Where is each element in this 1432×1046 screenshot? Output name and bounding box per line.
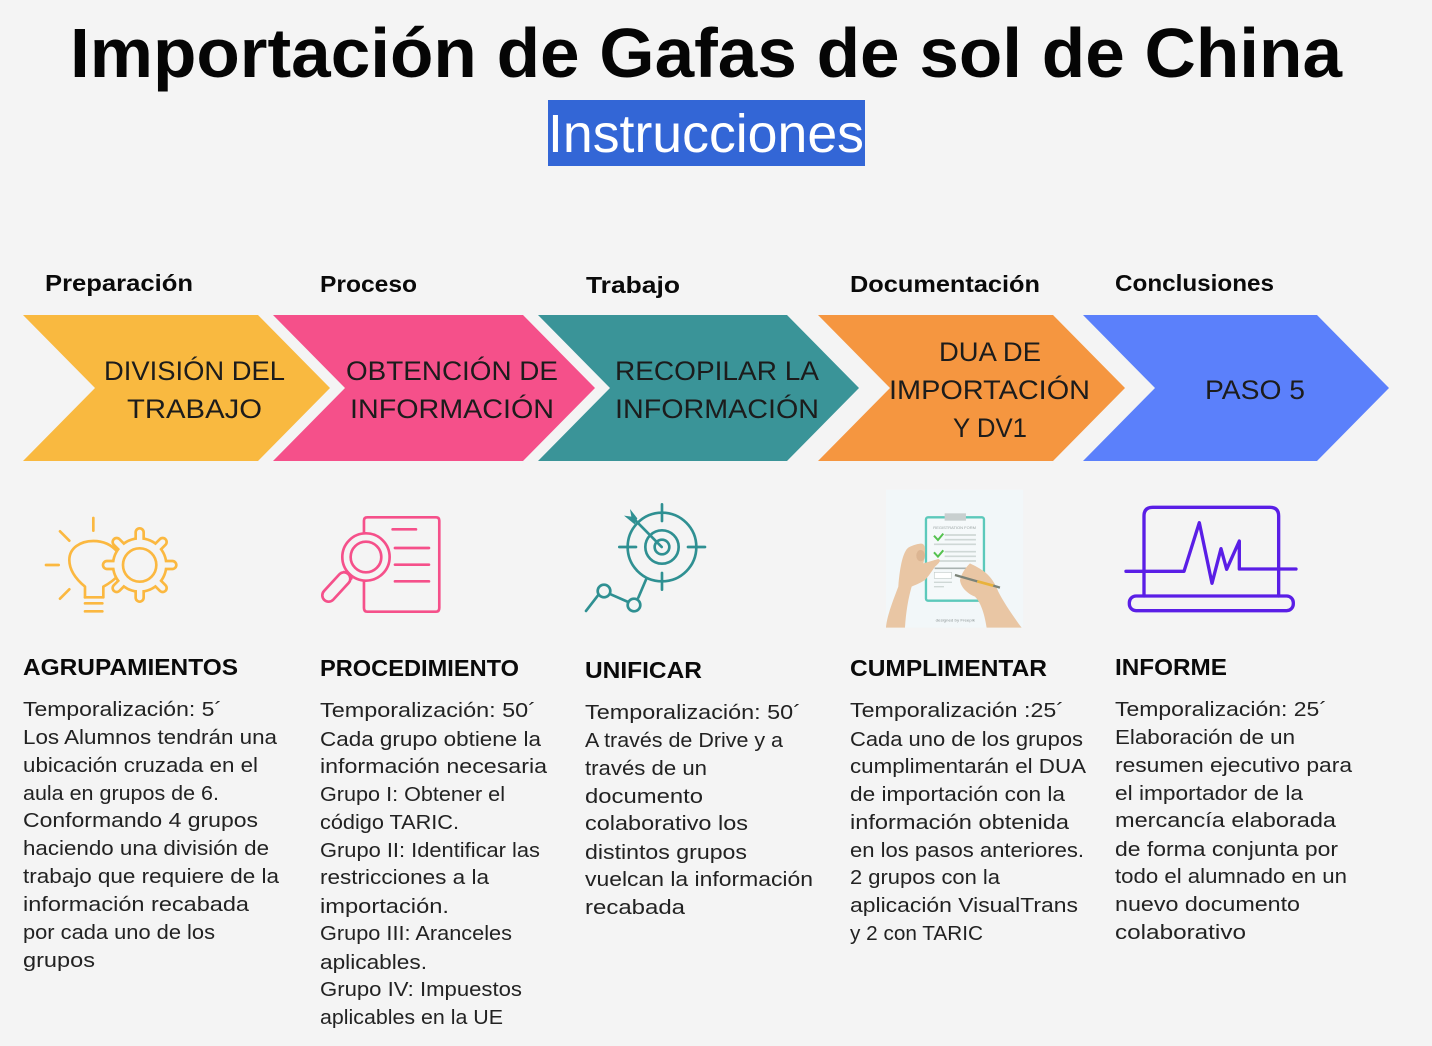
text block: procedimiento: importación. — [320, 895, 449, 918]
text block: cumplimentar: en los pasos anteriores. — [850, 839, 1084, 862]
step label: Documentación: Documentación — [850, 271, 1040, 297]
text block: agrupamientos: Los Alumnos tendrán una — [23, 726, 278, 749]
heading: agrupamientos: AGRUPAMIENTOS — [23, 654, 238, 680]
icon: hands filling in a form: REGISTRATION FORM — [933, 526, 976, 530]
text block: unificar: recabada — [585, 896, 686, 919]
arrow: obtención de información: INFORMACIÓN — [350, 394, 554, 424]
text block: unificar: través de un — [585, 757, 707, 780]
column: cumplimentar — [850, 655, 1086, 945]
icon: magnifier over document — [329, 517, 439, 612]
text block: agrupamientos: haciendo una división de — [23, 837, 269, 860]
icon: hands filling in a form — [886, 490, 1023, 628]
text block: procedimiento: Cada grupo obtiene la — [320, 728, 542, 751]
arrow: paso 5: PASO 5 — [1205, 375, 1305, 405]
text block: procedimiento: aplicables en la UE — [320, 1006, 503, 1029]
text block: unificar: vuelcan la información — [585, 868, 813, 891]
text block: procedimiento: Grupo II: Identificar las — [320, 839, 540, 862]
text block: agrupamientos: Conformando 4 grupos — [23, 809, 258, 832]
text block: procedimiento: código TARIC. — [320, 811, 459, 834]
text block: informe: todo el alumnado en un — [1115, 865, 1347, 888]
step label: Conclusiones: Conclusiones — [1115, 270, 1274, 296]
arrow: obtención de información: OBTENCIÓN DE — [346, 356, 558, 386]
text block: agrupamientos: por cada uno de los — [23, 921, 215, 944]
text block: procedimiento: Temporalización: 50´ — [320, 699, 536, 722]
text block: unificar — [585, 701, 813, 919]
arrow: DUA de importación: DUA DE — [939, 337, 1041, 367]
arrow: división del trabajo: DIVISIÓN DEL — [104, 356, 285, 386]
text block: procedimiento: Grupo III: Aranceles — [320, 922, 512, 945]
text block: procedimiento: Grupo I: Obtener el — [320, 783, 505, 806]
text block: informe: el importador de la — [1115, 782, 1304, 805]
text block: informe: mercancía elaborada — [1115, 809, 1337, 832]
step label: Trabajo: Trabajo — [586, 272, 680, 298]
text block: cumplimentar: información obtenida — [850, 811, 1070, 834]
text block: informe: nuevo documento — [1115, 893, 1300, 916]
icon: laptop with pulse line — [1126, 507, 1296, 611]
text block: unificar: documento — [585, 785, 703, 808]
arrow: DUA de importación — [818, 315, 1125, 461]
text block: procedimiento: restricciones a la — [320, 866, 490, 889]
arrow: recopilar la información: RECOPILAR LA — [615, 356, 819, 386]
heading: procedimiento: PROCEDIMIENTO — [320, 655, 519, 681]
text block: informe — [1115, 698, 1353, 944]
arrow: paso 5 — [1083, 315, 1389, 461]
title: Importación de Gafas de sol de China — [70, 14, 1343, 92]
text block: cumplimentar: 2 grupos con la — [850, 866, 1001, 889]
text block: agrupamientos: grupos — [23, 949, 95, 972]
subtitle: Instrucciones: Instrucciones — [548, 104, 864, 164]
icon: hands filling in a form: designed by Freepik — [936, 618, 975, 622]
text block: unificar: Temporalización: 50´ — [585, 701, 801, 724]
text block: agrupamientos: información recabada — [23, 893, 250, 916]
text block: procedimiento — [320, 699, 548, 1029]
text block: cumplimentar: aplicación VisualTrans — [850, 894, 1078, 917]
arrow: obtención de información — [273, 315, 595, 461]
heading: cumplimentar: CUMPLIMENTAR — [850, 655, 1047, 681]
text block: procedimiento: aplicables. — [320, 951, 427, 974]
text block: agrupamientos: Temporalización: 5´ — [23, 698, 222, 721]
arrow: división del trabajo — [23, 315, 330, 461]
text block: informe: de forma conjunta por — [1115, 838, 1338, 861]
text block: informe: colaborativo — [1115, 921, 1246, 944]
arrow: división del trabajo: TRABAJO — [127, 394, 262, 424]
text block: agrupamientos: ubicación cruzada en el — [23, 754, 258, 777]
column: unificar — [585, 657, 813, 919]
text block: cumplimentar: Temporalización :25´ — [850, 699, 1064, 722]
step label: Proceso: Proceso — [320, 271, 417, 297]
step label: Preparación: Preparación — [45, 270, 193, 296]
column: agrupamientos — [23, 654, 280, 972]
text block: informe: resumen ejecutivo para — [1115, 754, 1353, 777]
icon: lightbulb and gear — [46, 518, 172, 611]
column: informe — [1115, 654, 1353, 944]
text block: cumplimentar: de importación con la — [850, 783, 1066, 806]
text block: informe: Elaboración de un — [1115, 726, 1295, 749]
arrow: DUA de importación: Y DV1 — [953, 413, 1027, 443]
heading: informe: INFORME — [1115, 654, 1227, 680]
arrow: recopilar la información: INFORMACIÓN — [615, 394, 819, 424]
column: procedimiento — [320, 655, 548, 1029]
text block: cumplimentar: Cada uno de los grupos — [850, 728, 1083, 751]
heading: unificar: UNIFICAR — [585, 657, 702, 683]
text block: procedimiento: Grupo IV: Impuestos — [320, 978, 522, 1001]
text block: cumplimentar: cumplimentarán el DUA — [850, 755, 1086, 778]
text block: agrupamientos: aula en grupos de 6. — [23, 782, 219, 805]
text block: cumplimentar — [850, 699, 1086, 945]
text block: unificar: distintos grupos — [585, 841, 747, 864]
text block: unificar: A través de Drive y a — [585, 729, 784, 752]
text block: procedimiento: información necesaria — [320, 755, 548, 778]
text block: agrupamientos — [23, 698, 280, 972]
text block: cumplimentar: y 2 con TARIC — [850, 922, 983, 945]
text block: agrupamientos: trabajo que requiere de la — [23, 865, 280, 888]
icon: target with arrow and trend — [586, 504, 705, 611]
text block: unificar: colaborativo los — [585, 812, 748, 835]
text block: informe: Temporalización: 25´ — [1115, 698, 1327, 721]
arrow: recopilar la información — [538, 315, 859, 461]
arrow: DUA de importación: IMPORTACIÓN — [889, 375, 1090, 405]
